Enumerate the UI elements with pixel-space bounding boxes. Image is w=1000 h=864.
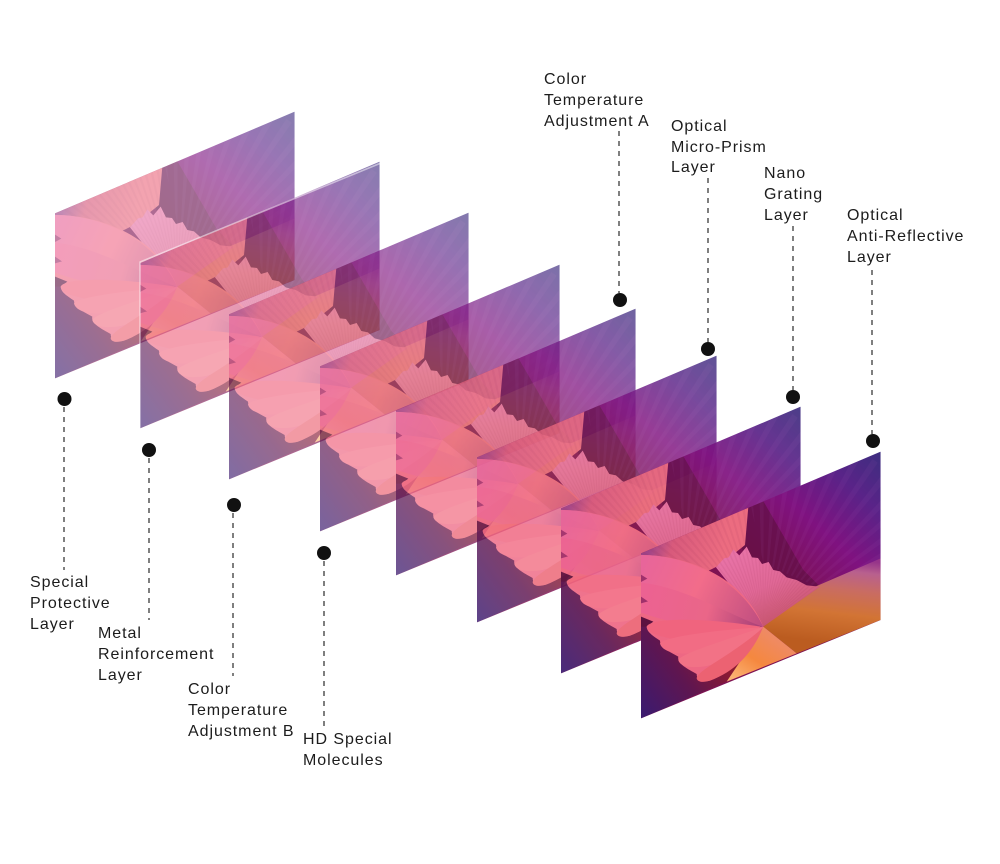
callout: HD special molecules: Molecules <box>303 752 384 769</box>
panel: special protective layer <box>44 103 304 387</box>
callout: metal reinforcement layer: Reinforcement <box>98 646 214 663</box>
callout: optical micro-prism layer: Micro-Prism <box>671 139 767 156</box>
callout: metal reinforcement layer <box>98 443 214 684</box>
panel: optical anti-reflective layer <box>630 443 890 727</box>
callout: color temperature adjustment B: Adjustment B <box>188 723 295 740</box>
callout: special protective layer: Special <box>30 574 89 591</box>
callout: optical micro-prism layer: Layer <box>671 159 716 176</box>
callout: special protective layer: Layer <box>30 616 75 633</box>
callout: nano grating layer: Grating <box>764 186 823 203</box>
panel: nano grating layer <box>550 398 810 682</box>
callout: HD special molecules: HD Special <box>303 731 393 748</box>
callout: optical anti-reflective layer <box>847 207 964 448</box>
panel: metal reinforcement layer <box>129 153 389 437</box>
exploded layer diagram <box>30 72 963 765</box>
callout: nano grating layer <box>764 165 823 404</box>
callout: metal reinforcement layer: Metal <box>98 625 142 642</box>
callout: optical anti-reflective layer: Optical <box>847 207 903 224</box>
callout: color temperature adjustment B: Color <box>188 681 231 698</box>
panel edge highlight <box>140 163 381 431</box>
panel: optical micro-prism layer <box>466 347 726 631</box>
callout: special protective layer <box>30 392 111 633</box>
callout: color temperature adjustment A: Adjustment A <box>544 113 650 130</box>
callout: optical anti-reflective layer: Layer <box>847 249 892 266</box>
callout: color temperature adjustment B <box>188 498 295 740</box>
callout: color temperature adjustment B: Temperature <box>188 702 288 719</box>
callout: HD special molecules <box>303 546 393 769</box>
callout: color temperature adjustment A: Temperature <box>544 92 644 109</box>
panel: HD special molecules <box>309 256 569 540</box>
callout: nano grating layer: Layer <box>764 207 809 224</box>
callout: color temperature adjustment A: Color <box>544 71 587 88</box>
callout: special protective layer: Protective <box>30 595 111 612</box>
panel: color temperature adjustment B <box>218 204 478 488</box>
callout: color temperature adjustment A <box>544 71 650 307</box>
callout: optical anti-reflective layer: Anti-Reflective <box>847 228 964 245</box>
callout: optical micro-prism layer: Optical <box>671 118 727 135</box>
panel: color temperature adjustment A <box>385 300 645 584</box>
callout: metal reinforcement layer: Layer <box>98 667 143 684</box>
callout: nano grating layer: Nano <box>764 165 806 182</box>
callout: optical micro-prism layer <box>671 118 767 356</box>
